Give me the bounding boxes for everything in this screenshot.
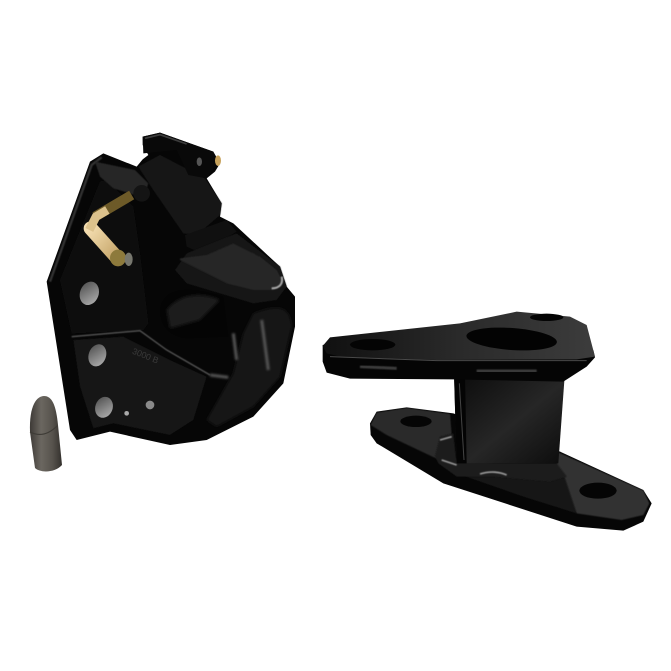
latch bolt highlight xyxy=(197,157,202,166)
mounting hole lower xyxy=(92,394,116,420)
lower plate face xyxy=(73,337,207,435)
mounting hole upper xyxy=(76,279,102,308)
pin body xyxy=(30,396,62,471)
weld bead xyxy=(435,433,567,482)
lower plate mid top xyxy=(443,457,577,513)
hook bowl glare marks xyxy=(210,320,268,377)
upper plate top xyxy=(323,312,595,360)
upper plate side xyxy=(323,343,595,382)
latch knob xyxy=(133,185,150,202)
top casting xyxy=(95,162,148,198)
lever bend xyxy=(89,210,107,230)
lever handle xyxy=(91,228,117,257)
brass bolt tip xyxy=(215,155,221,166)
plate edge highlight xyxy=(50,157,102,282)
lower hole right xyxy=(579,483,617,499)
lower plate top xyxy=(371,408,649,520)
column left edge xyxy=(454,375,467,463)
rib highlight xyxy=(72,331,210,375)
casting text: 3000 B xyxy=(131,346,160,366)
stud highlight xyxy=(124,411,129,416)
stepped block xyxy=(185,220,237,253)
lower hole left xyxy=(400,416,432,427)
upper hole large xyxy=(466,325,558,353)
pintle hook xyxy=(47,133,295,445)
square column xyxy=(454,372,565,463)
jaw glare xyxy=(272,277,282,288)
lower plate side xyxy=(370,407,652,531)
jaw inner shade xyxy=(167,295,220,328)
upper plate side glare xyxy=(360,367,537,371)
upper hole left xyxy=(350,339,395,350)
mounting plate face xyxy=(60,180,148,333)
brass lever xyxy=(89,195,133,266)
mounting hole middle xyxy=(85,342,109,369)
upper plate edge highlight xyxy=(330,357,587,361)
upper hole small xyxy=(530,314,563,321)
small stud xyxy=(146,401,154,409)
latch top highlight xyxy=(145,135,187,144)
jaw throat opening xyxy=(160,290,228,338)
loose pin xyxy=(30,396,62,471)
latch block xyxy=(138,155,222,235)
lever clip xyxy=(125,253,133,266)
weld glare xyxy=(440,437,507,475)
jaw cover highlight xyxy=(180,243,283,290)
pin shoulder xyxy=(30,426,57,434)
lever end cap xyxy=(110,250,126,266)
hook bowl shine xyxy=(207,308,292,427)
mounting bracket xyxy=(323,312,652,531)
hook jaw cover xyxy=(175,233,287,303)
hook body silhouette xyxy=(47,133,295,445)
latch top plate xyxy=(143,133,217,178)
column corner highlight xyxy=(459,383,464,460)
lever threaded shaft xyxy=(95,195,132,217)
